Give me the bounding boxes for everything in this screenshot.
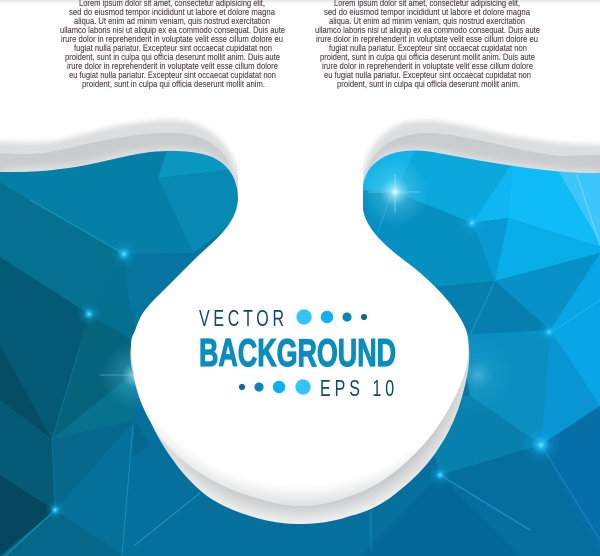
text block: left lorem ipsum: sed do eiusmod tempor incididunt ut labore et dolore magna: [69, 7, 275, 17]
dots: bottom row: [239, 379, 311, 395]
lighter glow along the blue edge: [0, 154, 600, 190]
text block: right lorem ipsum: proident, sunt in culpa qui officia deserunt mollit anim.: [337, 79, 520, 89]
text block: left lorem ipsum: aliqua. Ut enim ad minim veniam, quis nostrud exercitation: [74, 16, 270, 26]
left facets: [0, 140, 245, 556]
text block: left lorem ipsum: [60, 0, 285, 89]
text block: right lorem ipsum: [315, 0, 540, 89]
text block: right lorem ipsum: ullamco laboris nisi ut aliquip ex ea commodo consequat. Duis aute: [315, 25, 540, 35]
dots: top row: [296, 309, 367, 325]
text block: right lorem ipsum: sed do eiusmod tempor incididunt ut labore et dolore magna: [324, 7, 530, 17]
right lobe highlight: [362, 100, 600, 200]
white drop: [131, 120, 468, 506]
heading: EPS 10: EPS 10: [320, 376, 394, 402]
text block: right lorem ipsum: eu fugiat nulla pariatur. Excepteur sint occaecat cupidatat non: [324, 70, 531, 80]
light streaks: [5, 175, 600, 556]
text block: left lorem ipsum: eu fugiat nulla pariatur. Excepteur sint occaecat cupidatat non: [69, 70, 276, 80]
text block: left lorem ipsum: irure dolor in reprehenderit in voluptate velit esse cillum dolore: [67, 61, 278, 71]
text block: left lorem ipsum: irure dolor in reprehenderit in voluptate velit esse cillum dolore eu: [61, 34, 283, 44]
text block: right lorem ipsum: irure dolor in reprehenderit in voluptate velit esse cillum dolore: [322, 61, 533, 71]
soft shading at drop bottom: [131, 346, 468, 506]
text block: left lorem ipsum: fugiat nulla pariatur. Excepteur sint occaecat cupidatat non: [74, 43, 272, 53]
glowing nodes: [110, 240, 138, 268]
white fade above lobes: [0, 0, 600, 220]
text block: left lorem ipsum: proident, sunt in culpa qui officia deserunt mollit anim.: [82, 79, 265, 89]
text block: right lorem ipsum: fugiat nulla pariatur. Excepteur sint occaecat cupidatat non: [329, 43, 527, 53]
heading: VECTOR: VECTOR: [199, 306, 284, 332]
left lobe highlight: [0, 100, 240, 200]
lower rim of the drop: [130, 300, 469, 524]
text block: right lorem ipsum: proident, sunt in culpa qui officia deserunt mollit anim. Duis aute: [320, 52, 535, 62]
panel: low-poly blue background: [0, 140, 600, 556]
right facets: [355, 140, 600, 556]
text block: right lorem ipsum: irure dolor in reprehenderit in voluptate velit esse cillum dolore eu: [316, 34, 538, 44]
text block: right lorem ipsum: aliqua. Ut enim ad minim veniam, quis nostrud exercitation: [329, 16, 525, 26]
text block: left lorem ipsum: ullamco laboris nisi ut aliquip ex ea commodo consequat. Duis aute: [60, 25, 285, 35]
grey edge band, top lobes: [0, 0, 600, 400]
heading: BACKGROUND: BACKGROUND: [199, 332, 396, 375]
text block: left lorem ipsum: proident, sunt in culpa qui officia deserunt mollit anim. Duis aute: [65, 52, 280, 62]
